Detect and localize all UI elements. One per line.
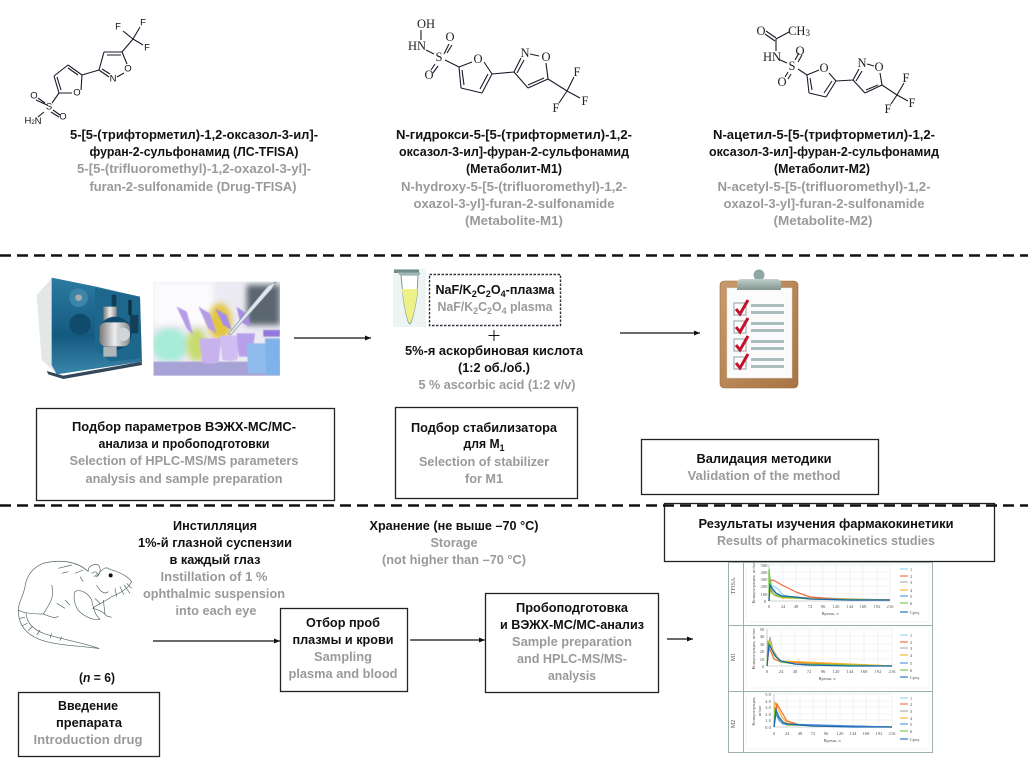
box: sample preparation: Sample preparation xyxy=(512,635,632,649)
chart: M2: 2.0 xyxy=(765,712,772,717)
molecule: Metabolite-M1: O xyxy=(445,30,455,44)
chart: TFISA: 300 xyxy=(761,577,768,582)
chart: M2: 5 xyxy=(910,722,913,727)
chart: M1: 3 xyxy=(910,646,913,651)
molecule: Drug-TFISA: H xyxy=(24,116,31,126)
caption: Metabolite-M2: N-acetyl-5-[5-(trifluoromethyl)-1,2- xyxy=(718,180,930,194)
caption: Drug-TFISA xyxy=(70,128,318,194)
chart: TFISA: 72 xyxy=(808,604,813,609)
dashed box: plasma: O xyxy=(491,283,501,297)
chart: TFISA: 200 xyxy=(761,584,768,589)
chart: M2: 5.0 xyxy=(765,692,772,697)
box: sample preparation: analysis xyxy=(548,669,596,683)
molecule: Drug-TFISA: 2 xyxy=(31,120,35,126)
molecule: Metabolite-M2: F xyxy=(885,102,892,116)
box: sampling: Sampling xyxy=(314,650,372,664)
caption: Drug-TFISA: furan-2-sulfonamide (Drug-TFISA) xyxy=(90,180,296,194)
molecule: Drug-TFISA: N xyxy=(35,116,42,126)
chart: M1: 40 xyxy=(760,634,765,639)
dashed box: plasma xyxy=(430,274,560,326)
chart: M2: нг/мл xyxy=(757,705,762,716)
chart: M2: 6 xyxy=(910,729,913,734)
chart: M1: 6 xyxy=(910,668,913,673)
box: pharmacokinetics results: Results of pharmacokinetics studies xyxy=(717,534,935,548)
box: sampling: Отбор проб xyxy=(306,616,380,630)
text: ascorbic acid: 5%-я аскорбиновая кислота xyxy=(405,344,584,358)
chart: M1: 1 xyxy=(910,633,913,638)
caption: Drug-TFISA: фуран-2-сульфонамид (ЛС-TFISA) xyxy=(90,145,298,159)
dashed box: plasma: O xyxy=(492,300,502,314)
molecule: Metabolite-M2: O xyxy=(795,44,805,58)
box: sample preparation: и ВЭЖХ-МС/МС-анализ xyxy=(500,618,644,632)
illustration: rat xyxy=(18,561,132,649)
arrow xyxy=(410,639,485,641)
chart: M1: 24 xyxy=(779,669,784,674)
chart: TFISA: TFISA xyxy=(731,577,737,594)
molecule: Drug-TFISA: S xyxy=(46,102,52,112)
text: instillation: 1%-й глазной суспензии xyxy=(138,536,292,550)
chart: TFISA xyxy=(731,562,929,622)
molecule: Metabolite-M1: O xyxy=(473,52,483,66)
box: sample preparation: Пробоподготовка xyxy=(516,601,629,615)
chart: M1: 50 xyxy=(760,627,765,632)
molecule: Metabolite-M2: O xyxy=(756,24,766,38)
dashed box: plasma: NaF/K xyxy=(436,283,472,297)
chart: M1: 0 xyxy=(766,669,769,674)
molecule: Drug-TFISA: F xyxy=(144,42,150,54)
text: instillation: into each eye xyxy=(176,604,257,618)
chart: M2: 4 xyxy=(910,716,913,721)
chart: M1: 96 xyxy=(821,669,826,674)
box: stabilizer selection: Selection of stabilizer xyxy=(419,455,549,469)
box: parameters selection: анализа и пробоподготовки xyxy=(98,437,270,451)
chart: TFISA: 96 xyxy=(821,604,826,609)
chart: M2: 24 xyxy=(785,731,790,736)
icon: clipboard checklist xyxy=(720,270,798,388)
molecule: Metabolite-M1: S xyxy=(436,50,443,64)
caption: Metabolite-M1: (Metabolite-M1) xyxy=(465,214,563,228)
text: storage: (not higher than –70 °C) xyxy=(382,553,526,567)
text: ascorbic acid: (1:2 об./об.) xyxy=(458,361,530,375)
molecule: Metabolite-M2: F xyxy=(903,71,910,85)
chart: M2: 0 xyxy=(773,731,776,736)
molecule: Metabolite-M1: OH xyxy=(417,17,435,31)
box: sample preparation xyxy=(486,594,658,692)
chart: TFISA: 0 xyxy=(764,599,767,604)
molecule: Drug-TFISA: O xyxy=(73,88,81,98)
molecule: Drug-TFISA xyxy=(24,18,150,126)
chart: TFISA: 100 xyxy=(761,592,768,597)
text: storage: Хранение (не выше –70 °C) xyxy=(370,519,538,533)
dashed box: plasma: 2 xyxy=(472,289,477,299)
box: pharmacokinetics results: Результаты изучения фармакокинетики xyxy=(698,517,954,531)
chart: M2: Сред. xyxy=(910,737,920,742)
caption: Metabolite-M2: оксазол-3-ил]-фуран-2-сульфонамид xyxy=(709,145,939,159)
chart: M1: 30 xyxy=(760,642,765,647)
caption: Metabolite-M2: (Metabolite-M2) xyxy=(774,214,872,228)
box: method validation: Validation of the method xyxy=(688,469,840,483)
chart: TFISA: 216 xyxy=(887,604,894,609)
caption: Metabolite-M2: N-ацетил-5-[5-(трифторметил)-1,2- xyxy=(713,128,935,142)
chart: TFISA: 24 xyxy=(781,604,786,609)
chart: TFISA: 0 xyxy=(768,604,771,609)
chart: M2: 0.0 xyxy=(765,725,772,730)
box: method validation: Валидация методики xyxy=(696,452,832,466)
photo: pipette and sample tubes xyxy=(152,282,280,378)
chart: M1: M1 xyxy=(731,653,737,661)
molecule: Metabolite-M1: F xyxy=(574,65,581,79)
molecule: Metabolite-M2: O xyxy=(874,60,884,74)
box: parameters selection: analysis and sample preparation xyxy=(86,472,282,486)
box: parameters selection: Selection of HPLC-MS/MS parameters xyxy=(70,454,299,468)
chart: M2: 3.0 xyxy=(765,705,772,710)
box: method validation xyxy=(642,440,878,494)
chart: M1: 4 xyxy=(910,653,913,658)
chart: M1: Концентрация, нг/мл xyxy=(751,628,757,670)
chart: M2: 168 xyxy=(863,731,870,736)
box: drug introduction: Введение xyxy=(58,699,118,713)
chart: M1: 144 xyxy=(847,669,854,674)
text: instillation: в каждый глаз xyxy=(170,553,260,567)
arrow xyxy=(153,640,280,642)
chart: M2: Концентрация, xyxy=(751,696,757,726)
molecule: Drug-TFISA: O xyxy=(124,64,132,74)
dashed box: plasma: -плазма xyxy=(506,283,556,297)
chart: M1: 48 xyxy=(793,669,798,674)
box: stabilizer selection: 1 xyxy=(500,443,505,453)
molecule: Metabolite-M1: F xyxy=(582,94,589,108)
box: sample preparation: and HPLC-MS/MS- xyxy=(517,652,627,666)
molecule: Metabolite-M1: O xyxy=(541,50,551,64)
caption: Metabolite-M1: N-hydroxy-5-[5-(trifluoromethyl)-1,2- xyxy=(401,180,627,194)
caption: Metabolite-M1: оксазол-3-ил]-фуран-2-сульфонамид xyxy=(399,145,629,159)
chart: TFISA: 3 xyxy=(910,580,913,585)
chart: TFISA: 192 xyxy=(874,604,881,609)
chart: M2: 72 xyxy=(811,731,816,736)
box: stabilizer selection: for M1 xyxy=(465,472,503,486)
chart: M2: Время, ч xyxy=(823,738,841,744)
molecule: Metabolite-M1: N xyxy=(520,46,530,60)
molecule: Metabolite-M1: O xyxy=(424,68,434,82)
molecule: Metabolite-M2: CH xyxy=(788,24,805,38)
caption: Metabolite-M2 xyxy=(709,128,939,228)
chart: M2 xyxy=(731,692,929,749)
box: stabilizer selection xyxy=(396,408,578,498)
text: storage: Storage xyxy=(430,536,478,550)
molecule: Drug-TFISA: N xyxy=(110,74,117,84)
caption: Drug-TFISA: 5-[5-(trifluoromethyl)-1,2-oxazol-3-yl]- xyxy=(77,162,311,176)
molecule: Drug-TFISA: F xyxy=(140,18,146,28)
chart: M2: 120 xyxy=(837,731,844,736)
chart: TFISA: 120 xyxy=(833,604,840,609)
icon: sample tube xyxy=(393,269,426,327)
molecule: Metabolite-M2: F xyxy=(909,96,916,110)
text: ascorbic acid xyxy=(405,344,584,392)
arrow xyxy=(294,337,371,339)
chart: M2: 96 xyxy=(824,731,829,736)
molecule: Drug-TFISA: F xyxy=(115,22,121,32)
caption: Drug-TFISA: 5-[5-(трифторметил)-1,2-оксазол-3-ил]- xyxy=(70,128,318,142)
box: pharmacokinetics results xyxy=(664,504,994,562)
chart: M1: Время, ч xyxy=(818,676,836,682)
chart: TFISA: 48 xyxy=(794,604,799,609)
chart: M1: 120 xyxy=(833,669,840,674)
chart: TFISA: 400 xyxy=(761,570,768,575)
box: stabilizer selection: Подбор стабилизатора xyxy=(411,421,558,435)
chart: TFISA: 2 xyxy=(910,574,913,579)
molecule: Metabolite-M2: O xyxy=(777,75,787,89)
chart: M1: 72 xyxy=(807,669,812,674)
molecule: Metabolite-M2 xyxy=(756,24,916,116)
caption: Metabolite-M2: (Метаболит-М2) xyxy=(774,162,870,176)
text: instillation: ophthalmic suspension xyxy=(143,587,285,601)
chart: M2: 192 xyxy=(876,731,883,736)
chart: M1 xyxy=(731,627,929,688)
chart: M2: 48 xyxy=(798,731,803,736)
panel: pharmacokinetic charts xyxy=(728,562,932,752)
dashed box: plasma: 2 xyxy=(473,306,478,316)
dashed box: plasma: NaF/K xyxy=(438,300,474,314)
dashed box: plasma: 2 xyxy=(486,289,491,299)
chart: M2: 4.0 xyxy=(765,699,772,704)
caption: Metabolite-M2: oxazol-3-yl]-furan-2-sulfonamide xyxy=(724,197,925,211)
chart: TFISA: 1 xyxy=(910,567,913,572)
chart: M2: 2 xyxy=(910,702,913,707)
chart: M2: 144 xyxy=(850,731,857,736)
molecule: Drug-TFISA: O xyxy=(59,112,67,122)
text: instillation: Инстилляция xyxy=(173,519,257,533)
chart: TFISA: Сред. xyxy=(910,610,920,615)
chart: M2: 1 xyxy=(910,696,913,701)
text: instillation: Instillation of 1 % xyxy=(160,570,268,584)
dashed box: plasma: 4 xyxy=(501,289,506,299)
text: ascorbic acid: 5 % ascorbic acid (1:2 v/v) xyxy=(418,378,576,392)
chart: M1: Сред. xyxy=(910,675,920,680)
chart: M1: 0 xyxy=(762,664,765,669)
chart: M2: M2 xyxy=(731,720,737,728)
dashed box: plasma: 4 xyxy=(502,306,507,316)
dashed box: plasma: C xyxy=(477,283,486,297)
box: parameters selection: Подбор параметров ВЭЖХ-МС/МС- xyxy=(72,420,296,434)
dashed box: plasma: 2 xyxy=(487,306,492,316)
molecule: Metabolite-M1: HN xyxy=(408,39,426,53)
caption: Metabolite-M1: oxazol-3-yl]-furan-2-sulfonamide xyxy=(414,197,615,211)
chart: M1: 2 xyxy=(910,640,913,645)
arrow xyxy=(620,332,700,334)
chart: M1: 192 xyxy=(875,669,882,674)
text: storage xyxy=(370,519,538,567)
box: drug introduction xyxy=(18,692,160,756)
molecule: Drug-TFISA: O xyxy=(30,90,38,102)
caption: Metabolite-M1: N-гидрокси-5-[5-(трифторметил)-1,2- xyxy=(396,128,632,142)
chart: M2: 216 xyxy=(889,731,896,736)
chart: TFISA: 5 xyxy=(910,594,913,599)
box: stabilizer selection: для М xyxy=(464,437,501,451)
chart: M1: 5 xyxy=(910,661,913,666)
molecule: Metabolite-M1: F xyxy=(553,101,560,115)
box: sampling: плазмы и крови xyxy=(292,633,394,647)
chart: TFISA: 6 xyxy=(910,601,913,606)
chart: TFISA: 500 xyxy=(761,563,768,568)
box: sampling xyxy=(280,608,408,692)
molecule: Metabolite-M2: O xyxy=(819,61,829,75)
chart: M1: 168 xyxy=(861,669,868,674)
box: drug introduction: Introduction drug xyxy=(34,733,142,747)
text: n = 6: (n = 6) xyxy=(79,671,115,685)
molecule: Metabolite-M1 xyxy=(408,17,589,115)
molecule: Metabolite-M2: N xyxy=(857,56,867,70)
chart: TFISA: 144 xyxy=(847,604,854,609)
molecule: Metabolite-M2: S xyxy=(789,59,796,73)
caption: Metabolite-M1 xyxy=(396,128,632,228)
caption: Metabolite-M1: (Метаболит-М1) xyxy=(466,162,562,176)
molecule: Metabolite-M2: HN xyxy=(763,50,781,64)
chart: M1: 216 xyxy=(889,669,896,674)
chart: M2: 1.0 xyxy=(765,718,772,723)
dashed box: plasma: plasma xyxy=(507,300,554,314)
dashed box: plasma: C xyxy=(478,300,487,314)
molecule: Metabolite-M2: 3 xyxy=(805,28,810,38)
text: instillation xyxy=(138,519,292,618)
chart: TFISA: Концентрация, нг/мл xyxy=(751,562,757,604)
chart: M1: 20 xyxy=(760,649,765,654)
chart: TFISA: 4 xyxy=(910,588,913,593)
box: drug introduction: препарата xyxy=(56,716,123,730)
chart: M2: 3 xyxy=(910,709,913,714)
arrow xyxy=(667,638,693,640)
chart: TFISA: Время, ч xyxy=(821,611,839,617)
chart: TFISA: 168 xyxy=(860,604,867,609)
box: parameters selection xyxy=(36,408,334,500)
plus sign xyxy=(488,330,500,341)
chart: M1: 10 xyxy=(760,657,765,662)
box: sampling: plasma and blood xyxy=(288,667,398,681)
photo: HPLC-MS instrument xyxy=(37,278,142,379)
